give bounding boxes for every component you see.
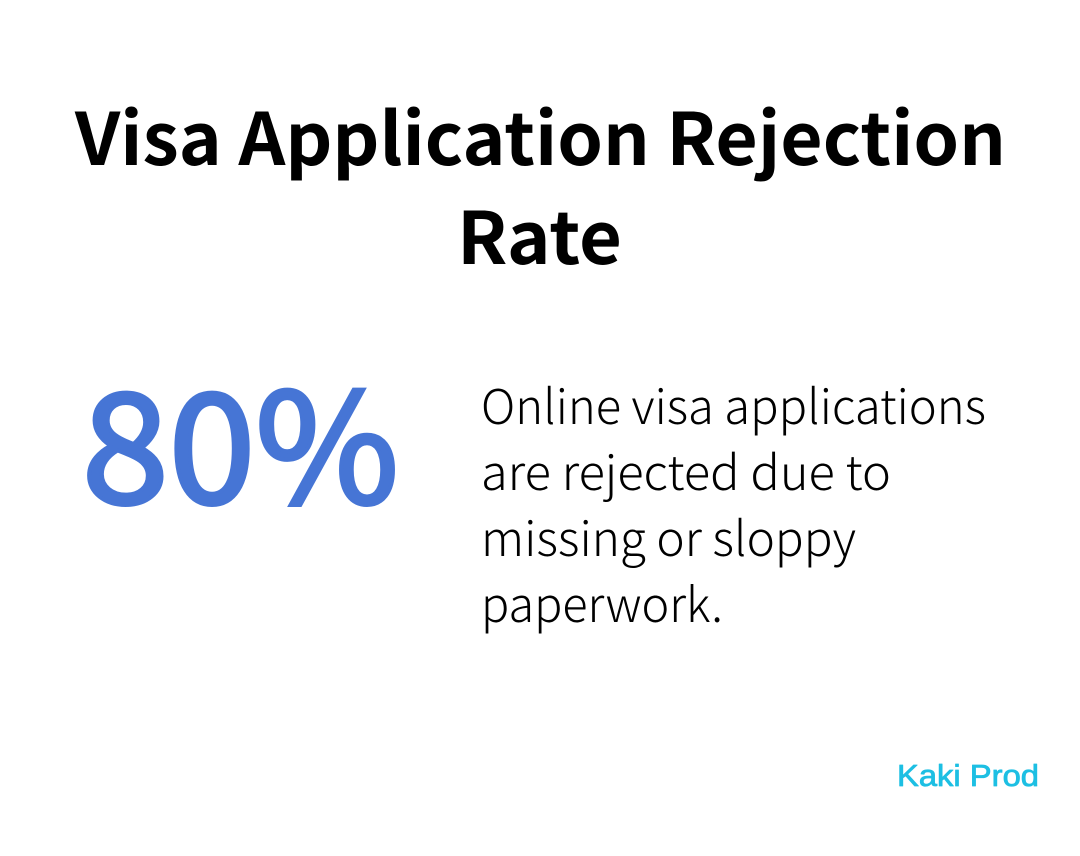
description text: are rejected due to xyxy=(481,434,891,504)
title xyxy=(74,81,1006,285)
description text: missing or sloppy xyxy=(481,500,856,570)
title: Rate xyxy=(457,180,622,285)
description text: paperwork. xyxy=(481,566,723,636)
description text: Online visa applications xyxy=(481,368,986,438)
big statistic: 80%: 80% xyxy=(82,327,399,547)
description text xyxy=(481,368,986,636)
logo: Kaki Prod: Kaki Prod xyxy=(897,758,1039,793)
title: Visa Application Rejection xyxy=(74,81,1006,186)
